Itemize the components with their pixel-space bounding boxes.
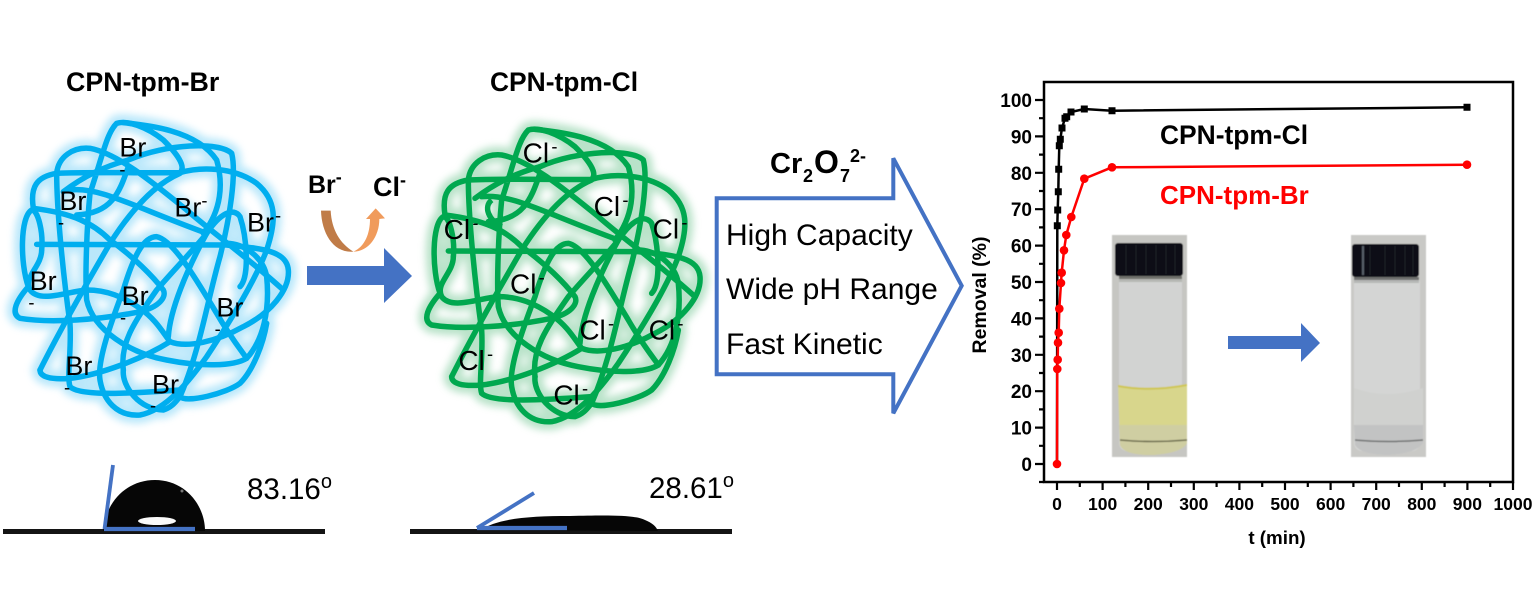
ion exchange label and curved arrow: - [336,167,342,187]
photo: vial after, clear solution [1351,235,1426,457]
contact angle value: 83.16: o [321,471,332,493]
polymer network: CPN-tpm-Br: - [201,190,207,211]
polymer network: CPN-tpm-Cl: Cl [510,268,536,299]
contact angle value: 83.16: 83.16 [247,473,321,506]
x axis labels: 0 [1052,494,1062,514]
ion exchange label and curved arrow: Br [308,171,336,199]
y axis labels: 40 [1011,309,1032,330]
polymer network: CPN-tpm-Br: Br [247,208,274,238]
arrow: Br to Cl conversion [307,248,412,303]
x axis labels: 600 [1316,494,1345,514]
x axis labels: 400 [1225,494,1254,514]
title: CPN-tpm-Br: CPN-tpm-Br [66,67,220,97]
polymer network: CPN-tpm-Cl: Cl [653,213,679,244]
y axis labels: 100 [1000,91,1032,112]
y axis labels [1000,91,1032,476]
x axis labels: 300 [1179,494,1209,514]
y axis labels: 60 [1011,237,1032,258]
ion exchange label and curved arrow: Cl [373,172,400,202]
y axis labels: 0 [1021,455,1032,476]
polymer network: CPN-tpm-Br: Br [216,293,243,323]
polymer network: CPN-tpm-Cl: - [608,312,614,333]
y axis labels: 70 [1011,200,1032,221]
contact angle image: CPN-tpm-Br [3,465,325,534]
polymer network: CPN-tpm-Br: Br [122,281,149,311]
formula: Cr2O7 2-: 7 [840,166,850,186]
polymer network: CPN-tpm-Br: - [275,205,281,226]
contact angle value: 28.61: 28.61 [649,472,723,505]
formula: Cr2O7 2-: Cr [770,148,802,180]
x axis labels: 100 [1088,494,1117,514]
y axis labels: 50 [1011,273,1032,294]
black series: CPN-tpm-Cl [1054,104,1470,464]
polymer network: CPN-tpm-Cl [427,129,700,422]
photo: vial before, yellow solution [1112,235,1187,457]
polymer network: CPN-tpm-Br: Br [119,133,146,163]
polymer network: CPN-tpm-Cl: - [472,212,478,233]
polymer network: CPN-tpm-Cl: Cl [523,138,549,169]
polymer network: CPN-tpm-Br: - [150,395,156,416]
polymer network: CPN-tpm-Cl: - [681,211,687,232]
polymer network: CPN-tpm-Br: Br [174,193,201,223]
outlined arrow with properties: High Capacity [726,219,913,252]
polymer network: CPN-tpm-Cl: Cl [553,379,580,410]
arrow: before to after [1228,323,1320,362]
x axis labels: 700 [1362,494,1391,514]
polymer network: CPN-tpm-Cl: - [677,312,683,333]
y axis labels: 90 [1011,127,1032,148]
x axis labels: 900 [1453,494,1482,514]
red series: CPN-tpm-Br [1053,160,1471,468]
formula: Cr2O7 2-: O [814,144,839,180]
outlined arrow with properties: Fast Kinetic [726,328,883,361]
polymer network: CPN-tpm-Cl: - [582,377,588,398]
ion exchange label and curved arrow: - [400,170,406,190]
polymer network: CPN-tpm-Br: - [58,212,64,233]
polymer network: CPN-tpm-Br: - [119,158,125,179]
polymer network: CPN-tpm-Cl: - [539,266,545,287]
x axis title: t (min) [1248,527,1306,548]
polymer network: CPN-tpm-Cl: Cl [579,314,606,345]
chart: removal vs time [969,82,1533,548]
polymer network: CPN-tpm-Cl: Cl [594,191,620,222]
y axis labels: 20 [1011,382,1032,403]
polymer network: CPN-tpm-Cl: - [551,136,557,157]
polymer network: CPN-tpm-Cl: Cl [458,345,485,376]
x axis labels: 200 [1134,494,1163,514]
ion exchange label and curved arrow [308,167,406,252]
polymer network: CPN-tpm-Cl: - [622,189,628,210]
polymer network: CPN-tpm-Br: Br [65,351,92,381]
polymer network: CPN-tpm-Cl: - [487,343,493,364]
polymer network: CPN-tpm-Br: Br [152,369,179,399]
y axis title: Removal (%) [969,236,991,354]
polymer network: CPN-tpm-Br: - [215,318,221,339]
y axis labels: 30 [1011,346,1032,367]
formula: Cr2O7 2-: 2 [803,166,813,186]
formula: Cr2O7 2-: 2- [850,146,866,166]
y axis labels: 10 [1011,419,1032,440]
title: CPN-tpm-Cl: CPN-tpm-Cl [490,67,638,97]
polymer network: CPN-tpm-Br: Br [30,266,57,296]
contact angle image: CPN-tpm-Cl [410,493,732,534]
chart axes and frame [1035,82,1513,490]
y axis labels: 80 [1011,164,1032,185]
legend: CPN-tpm-Cl: CPN-tpm-Cl [1160,120,1308,150]
x axis labels: 800 [1407,494,1437,514]
formula: Cr2O7 2- [770,144,866,186]
polymer network: CPN-tpm-Cl: Cl [444,214,470,245]
x axis labels: 500 [1270,494,1300,514]
polymer network: CPN-tpm-Br: - [120,306,126,327]
polymer network: CPN-tpm-Br: - [64,376,70,397]
polymer network: CPN-tpm-Br [15,122,288,416]
polymer network: CPN-tpm-Br: Br [59,186,86,216]
outlined arrow with properties [717,158,962,413]
x axis labels: 1000 [1494,494,1533,514]
contact angle value: 28.61: o [723,470,734,492]
polymer network: CPN-tpm-Cl: Cl [649,314,675,345]
legend: CPN-tpm-Br: CPN-tpm-Br [1160,180,1309,210]
x axis labels [1052,494,1533,514]
outlined arrow with properties: Wide pH Range [726,273,938,306]
polymer network: CPN-tpm-Br: - [28,291,34,312]
